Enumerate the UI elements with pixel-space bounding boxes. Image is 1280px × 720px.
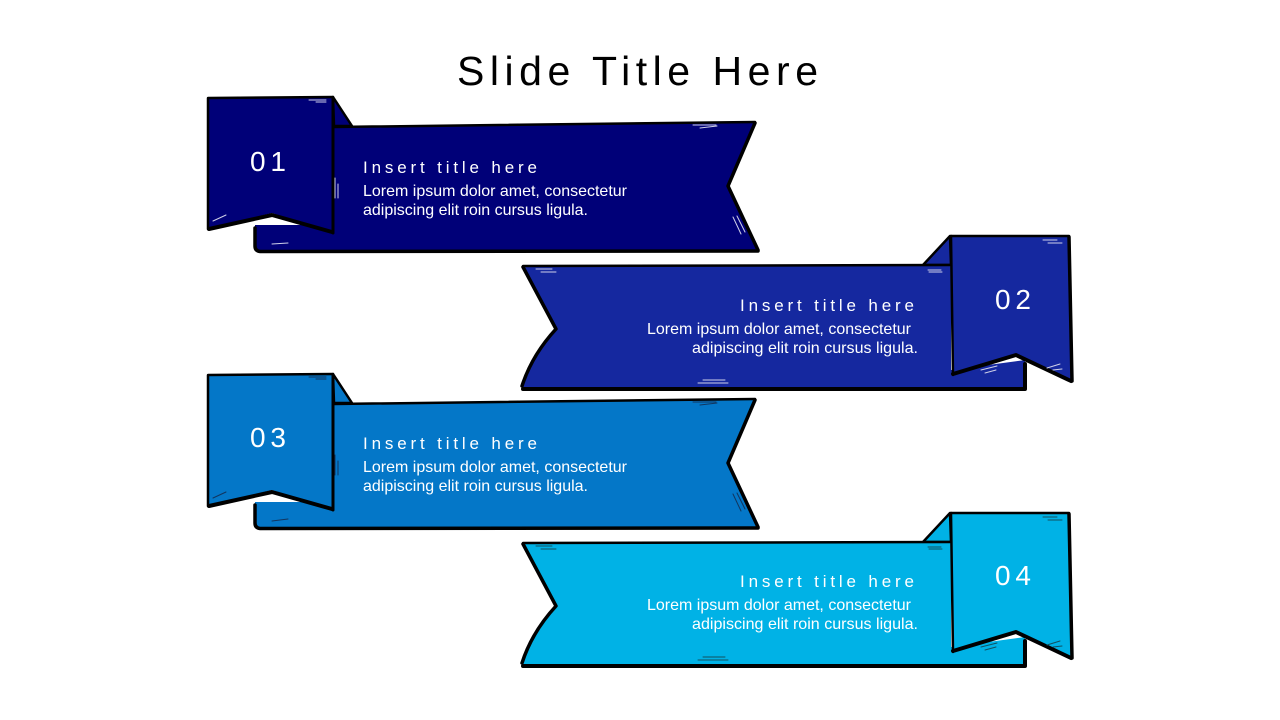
body text 04: Lorem ipsum dolor amet, consectetur: [647, 597, 912, 614]
body text 02: Lorem ipsum dolor amet, consectetur: [647, 321, 912, 338]
number 02: 02: [995, 284, 1031, 315]
heading 04: Insert title here: [740, 572, 914, 591]
ribbon 03: [208, 374, 758, 528]
body text 01: [363, 183, 628, 219]
body text 04: [647, 597, 918, 633]
ribbon 02: [522, 236, 1072, 389]
bookmark flag 03: [208, 374, 338, 510]
ribbon body 01: [255, 97, 758, 252]
ribbon body 03: [255, 374, 758, 528]
number 04: 04: [995, 560, 1031, 591]
title: Slide Title Here: [457, 48, 818, 94]
body text 03: [363, 459, 628, 495]
body text 01: adipiscing elit roin cursus ligula.: [363, 202, 588, 219]
bookmark flag 04: [951, 513, 1072, 658]
body text 01: Lorem ipsum dolor amet, consectetur: [363, 183, 628, 200]
body text 04: adipiscing elit roin cursus ligula.: [692, 616, 918, 633]
bookmark flag 01: [208, 97, 338, 233]
heading 01: Insert title here: [363, 158, 537, 177]
number 01: 01: [250, 146, 286, 177]
ribbon body 04: [522, 513, 1025, 666]
heading 03: Insert title here: [363, 434, 537, 453]
number 03: 03: [250, 422, 286, 453]
ribbon 04: [522, 513, 1072, 666]
body text 03: Lorem ipsum dolor amet, consectetur: [363, 459, 628, 476]
body text 02: adipiscing elit roin cursus ligula.: [692, 340, 918, 357]
heading 02: Insert title here: [740, 296, 914, 315]
bookmark flag 02: [951, 236, 1072, 381]
body text 02: [647, 321, 918, 357]
body text 03: adipiscing elit roin cursus ligula.: [363, 478, 588, 495]
ribbon body 02: [522, 236, 1025, 389]
ribbon 01: [208, 97, 758, 252]
